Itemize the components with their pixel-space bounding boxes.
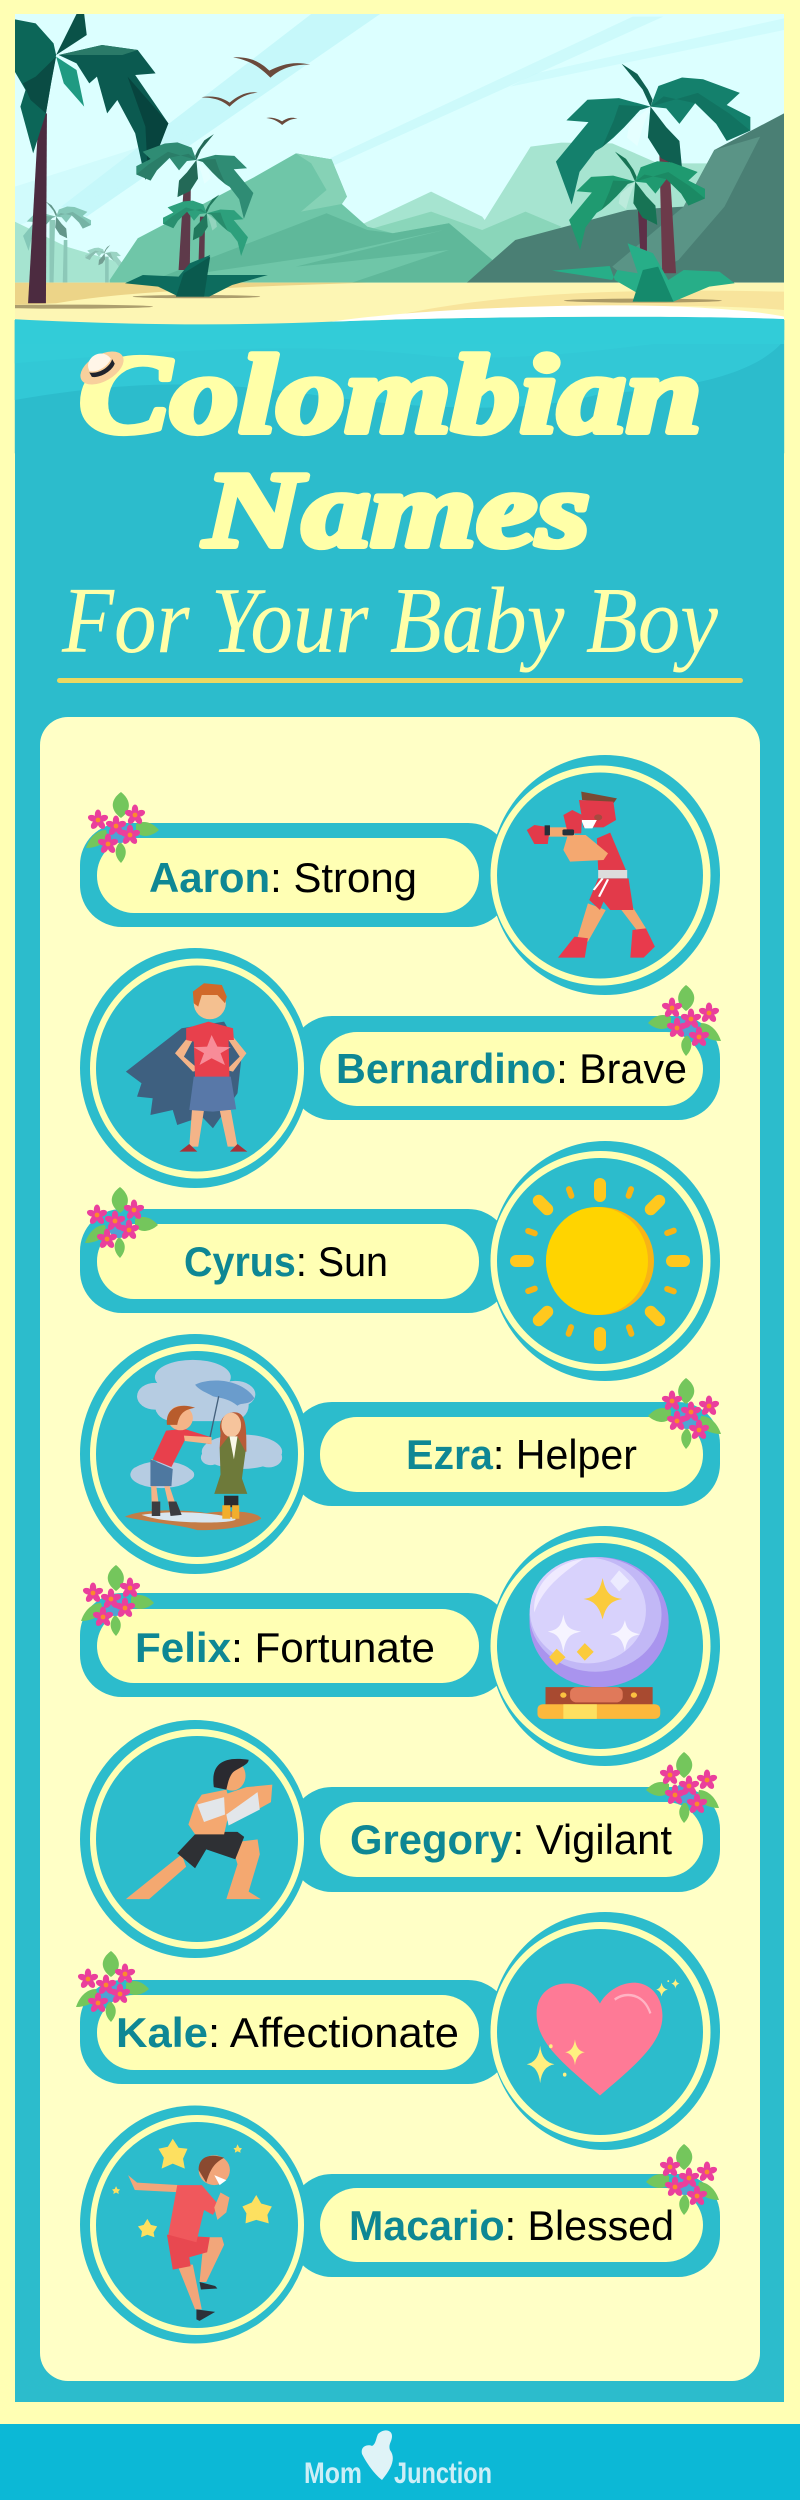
badge circle xyxy=(490,755,720,995)
pill xyxy=(97,1609,479,1683)
row: Macario xyxy=(80,2106,720,2344)
label: Bernardino: Brave xyxy=(336,1045,687,1092)
distant palms xyxy=(23,202,91,251)
bar xyxy=(80,1209,510,1313)
title: Names: Names xyxy=(203,451,590,570)
row: Bernardino xyxy=(80,948,721,1188)
sea edge xyxy=(15,316,784,344)
shadows xyxy=(0,295,722,309)
underline xyxy=(57,678,743,683)
bar xyxy=(290,1402,720,1506)
row: Felix xyxy=(80,1526,720,1766)
row: Kale xyxy=(76,1912,720,2150)
label: Gregory: Vigilant xyxy=(350,1816,672,1863)
logo: MomJunction xyxy=(304,2430,492,2490)
row: Ezra xyxy=(80,1334,721,1574)
icon: boxer xyxy=(527,792,655,958)
sky xyxy=(15,14,784,291)
icon: crystal ball xyxy=(529,1557,669,1719)
illustration: beach scene xyxy=(0,14,784,353)
icon: superhero boy xyxy=(126,983,247,1152)
label: Felix: Fortunate xyxy=(135,1624,435,1671)
icon: fighter xyxy=(126,1759,272,1899)
icon: heart xyxy=(527,1979,679,2096)
badge circle xyxy=(490,1141,720,1381)
logo: MomJunction: Junction xyxy=(394,2457,492,2490)
badge circle xyxy=(80,2106,310,2344)
sand xyxy=(15,283,784,325)
bar xyxy=(290,1016,720,1120)
icon: flowers xyxy=(648,1378,721,1449)
icon: flowers xyxy=(648,985,721,1056)
badge circle xyxy=(490,1526,720,1766)
distant mountains xyxy=(364,142,707,230)
label: Aaron: Strong xyxy=(149,854,417,901)
title: Colombian: Colombian xyxy=(79,333,702,457)
badge circle xyxy=(80,948,310,1188)
icon: flowers xyxy=(85,1187,158,1258)
icon: flowers xyxy=(646,1752,719,1823)
left palm group xyxy=(125,134,268,297)
pill xyxy=(97,838,479,913)
panel: names card xyxy=(40,717,760,2381)
icon: flowers xyxy=(76,1951,149,2022)
bar xyxy=(80,1593,510,1697)
right palm group xyxy=(552,64,750,302)
green mountain xyxy=(110,153,448,282)
icon: sun xyxy=(510,1178,690,1351)
logo: MomJunction: Mom xyxy=(304,2457,362,2490)
big left palm xyxy=(15,14,168,303)
label: Kale: Affectionate xyxy=(116,2009,459,2056)
icon: hat xyxy=(74,343,129,391)
subtitle: For Your Baby Boy xyxy=(61,569,718,673)
icon: flowers xyxy=(81,1565,154,1636)
icon: flowers xyxy=(646,2144,719,2215)
pill xyxy=(320,1417,703,1492)
icon: happy boy with stars xyxy=(112,2139,272,2321)
row: Cyrus xyxy=(80,1141,720,1381)
birds xyxy=(202,57,310,125)
icon: couple under umbrella xyxy=(125,1360,282,1530)
icon: flowers xyxy=(86,792,159,863)
row: Aaron xyxy=(80,755,720,995)
footer band xyxy=(0,2424,800,2500)
pill xyxy=(320,1802,703,1877)
label: Macario: Blessed xyxy=(349,2202,674,2249)
badge circle xyxy=(80,1334,310,1574)
label: Ezra: Helper xyxy=(406,1431,637,1478)
badge circle xyxy=(490,1912,720,2150)
label: Cyrus: Sun xyxy=(184,1238,388,1285)
icon: mother and baby xyxy=(362,2430,393,2480)
row: Gregory xyxy=(80,1720,720,1958)
panel: ocean waves xyxy=(15,320,784,453)
bar xyxy=(290,2174,720,2277)
pill xyxy=(320,2188,703,2262)
pill xyxy=(320,1032,703,1106)
badge circle xyxy=(80,1720,310,1958)
pill xyxy=(97,1995,479,2070)
bar xyxy=(290,1787,720,1892)
sky rays xyxy=(15,14,784,227)
bar xyxy=(80,1980,510,2084)
bar xyxy=(80,823,510,927)
pill xyxy=(97,1224,479,1299)
dark rock xyxy=(467,113,784,283)
